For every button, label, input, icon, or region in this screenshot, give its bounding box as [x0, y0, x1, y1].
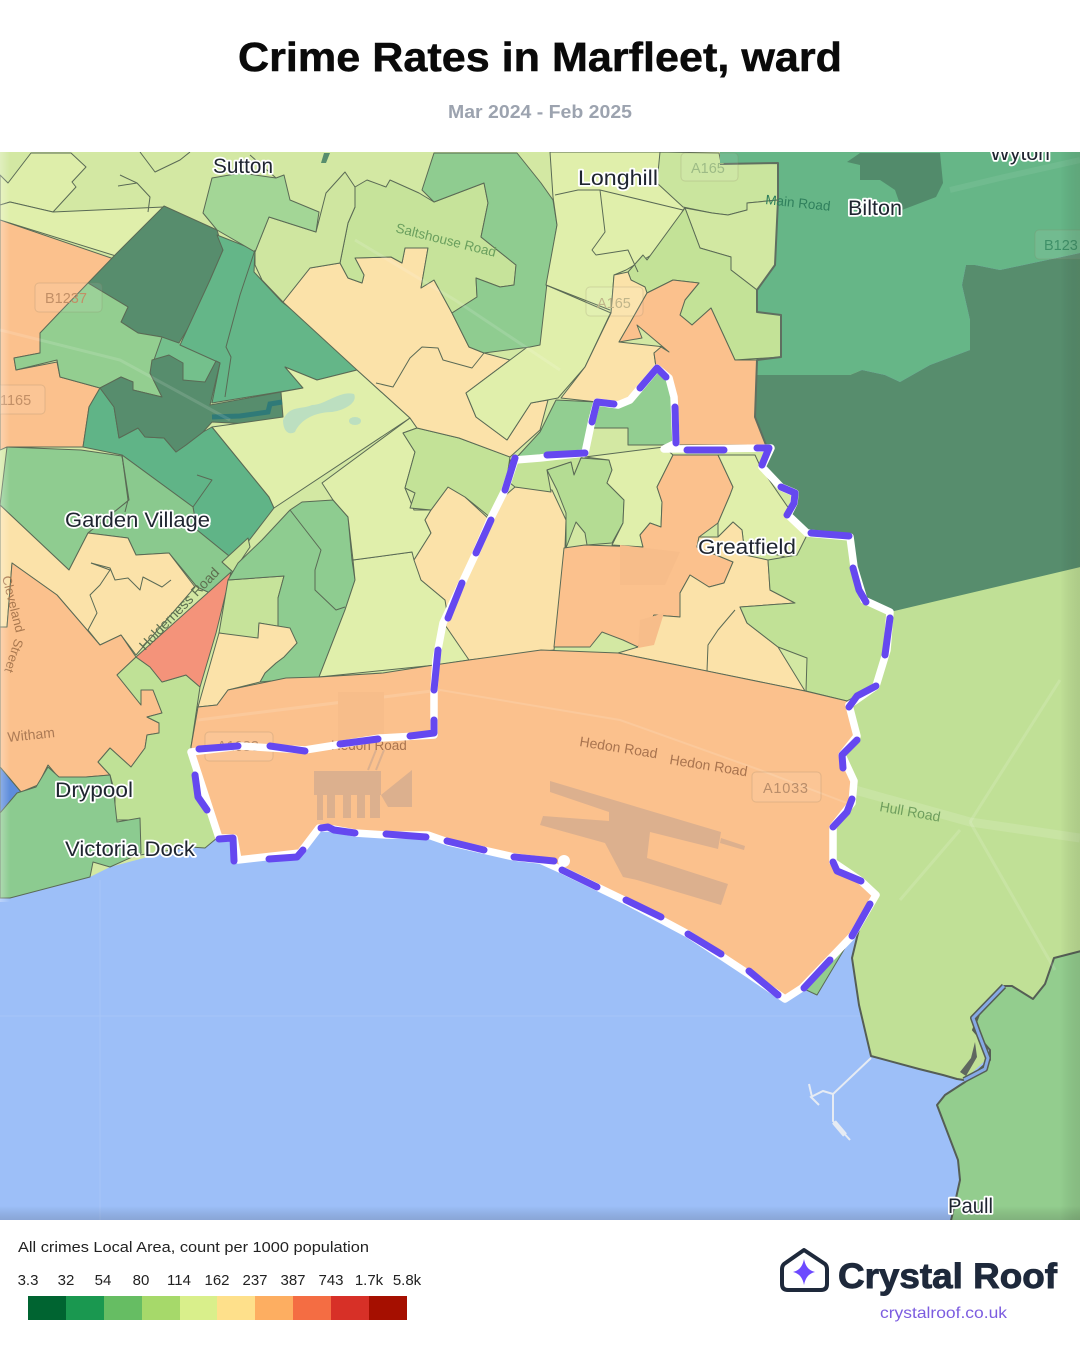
ward: east coast line: [852, 929, 964, 1080]
label: Drypool: Drypool: [55, 779, 133, 802]
ward: tan Marfleet west: [443, 487, 566, 660]
road number: A165: A165: [597, 296, 631, 312]
ward: lime inside: [547, 458, 624, 548]
ward: wedge on coast: [802, 936, 852, 995]
boundary: white outline: [191, 368, 890, 999]
road number: B1237: B1237: [45, 291, 87, 307]
road names: [0, 161, 1078, 825]
legend scale labels: 162: [204, 1272, 230, 1289]
ward: orange Witham: [0, 563, 162, 792]
ward: tan Greatfield: [618, 522, 805, 691]
road name: Holderness Road: Holderness Road: [136, 564, 222, 653]
ward: orange north centre: [619, 280, 766, 445]
map edge shading: [0, 152, 1080, 1220]
ward: mid green Victoria Dock: [0, 767, 141, 898]
ward: dark green north-west: [88, 206, 223, 343]
label: Greatfield: Greatfield: [698, 536, 796, 559]
website url: crystalroof.co.uk: [880, 1305, 1008, 1322]
ward: tan north centre: [561, 272, 665, 406]
faint roads: [0, 160, 1080, 970]
legend scale labels: 3.3: [18, 1272, 38, 1289]
ward: tan large north: [283, 248, 548, 457]
land base: [0, 152, 860, 898]
label: Bilton: Bilton: [848, 197, 902, 220]
road number: A165 top: A165: [691, 161, 725, 177]
park pond: [283, 393, 361, 433]
ward: mid green Garden Village: [0, 447, 129, 570]
legend scale labels: 54: [95, 1272, 111, 1289]
logo wordmark: Crystal Roof: [838, 1257, 1057, 1296]
ward: backing mid green centre-west: [150, 337, 220, 403]
ward: top-left pale: [0, 153, 86, 212]
label: Sutton: Sutton: [213, 155, 273, 178]
legend scale labels: 114: [167, 1272, 191, 1289]
subtitle: Mar 2024 - Feb 2025: [448, 102, 632, 122]
road badges: [0, 153, 1080, 802]
ward: green central-west: [180, 235, 357, 403]
legend title: All crimes Local Area, count per 1000 population: [18, 1239, 369, 1256]
legend scale labels: 32: [58, 1272, 74, 1289]
map: [0, 152, 1080, 1220]
ward: dark green centre: [100, 355, 283, 452]
ward: green south of dark: [83, 388, 274, 560]
road name: Main Road: Main Road: [765, 192, 831, 214]
Sutton small dark patch: [321, 153, 330, 163]
ward: lime north: [255, 172, 355, 302]
ward: orange north-west: [0, 220, 114, 450]
road name: Saltshouse Road: Saltshouse Road: [394, 220, 498, 260]
legend scale labels: 5.8k: [393, 1272, 422, 1289]
ward: mid green Sutton: [203, 173, 319, 252]
ward: lime centre: [403, 428, 510, 518]
label: Paull: Paull: [948, 1195, 993, 1218]
ward: tan centre: [414, 487, 490, 618]
legend scale labels: [18, 1272, 422, 1289]
river channel east: [964, 986, 1004, 1080]
ward: mid green north of Holderness Road: [88, 455, 234, 593]
ward: mid green west: [14, 283, 162, 397]
legend scale labels: 80: [133, 1272, 149, 1289]
ward: interior boundary lines: [88, 152, 735, 671]
ward: lime north-east: [685, 200, 778, 290]
ward: Bilton west edge: [720, 163, 781, 445]
label: Garden Village: Garden Village: [65, 509, 210, 532]
creek mouth mark: [960, 1042, 977, 1076]
jetty: [809, 1058, 871, 1140]
ward: lime Drypool east: [98, 657, 217, 855]
label: Longhill: Longhill: [578, 167, 658, 190]
ward: orange Greatfield west: [554, 455, 733, 647]
ward: red Holderness: [136, 572, 231, 687]
road name: Hedon Road 2: Hedon Road: [669, 751, 749, 779]
ward: lime north-east top: [657, 152, 778, 215]
ward: tan west: [0, 505, 195, 655]
label: Victoria Dock: Victoria Dock: [65, 838, 196, 861]
ward: lime south: [219, 576, 284, 640]
ward: lime Saltshouse: [340, 180, 516, 313]
ward: pale centre: [322, 418, 431, 560]
logo icon: house with star: [782, 1250, 827, 1290]
ward: park pale: [212, 367, 410, 508]
road number: A1033: A1033: [763, 781, 808, 797]
sea: [0, 152, 1080, 1220]
ward: tan south-west: [198, 623, 297, 707]
footer: [18, 1239, 1058, 1322]
ward: sliver lime: [222, 538, 250, 572]
darker industrial patches on orange: [338, 545, 680, 740]
ward: mid green inside boundary: [517, 368, 676, 458]
boundary: white spur: [558, 855, 570, 867]
ward: lime wedge: [510, 454, 585, 492]
ward boundary highlight: [191, 368, 890, 999]
road name: Witham: Witham: [7, 724, 56, 745]
docks buildings: [314, 750, 745, 905]
legend scale labels: 1.7k: [355, 1272, 384, 1289]
road number: B123: B123: [1044, 238, 1078, 254]
water channel: [212, 402, 282, 417]
road number: A1033 west: A1033: [217, 739, 259, 755]
ward: pale Longhill: [546, 152, 685, 313]
ward: pale inside: [585, 447, 673, 547]
ward: south-east mid green: [937, 950, 1080, 1225]
header: [238, 34, 842, 122]
ward: top-left band: [0, 202, 164, 256]
ward: mid green east of Holderness Road: [228, 500, 355, 682]
road name: Hedon Road 1: Hedon Road: [579, 733, 659, 761]
road name: Street: Street: [1, 637, 26, 675]
ward: lime east of Greatfield: [740, 535, 890, 701]
place labels: [55, 142, 1050, 1218]
legend colour bar: [28, 1296, 407, 1320]
title: Crime Rates in Marfleet, ward: [238, 34, 842, 80]
east lime farmland: [833, 563, 1080, 1080]
ward: river Hull at map edge: [0, 767, 21, 813]
ward: pale south centre: [319, 552, 469, 677]
ward: mid green north: [422, 153, 557, 353]
ward: pale north centre: [466, 285, 612, 440]
sea tile seams: [0, 880, 870, 1220]
road number: 1165: 1165: [0, 393, 31, 409]
ward: lime Sutton Park: [628, 208, 781, 360]
legend scale labels: 387: [280, 1272, 306, 1289]
road name: Hull Road: Hull Road: [878, 798, 942, 825]
legend scale labels: 237: [242, 1272, 268, 1289]
road name: Hedon Road west: Hedon Road: [331, 738, 407, 753]
choropleth wards: [0, 150, 1080, 1225]
ward: Wilmington dark patch: [847, 153, 943, 210]
ward: pale Greatfield: [718, 455, 807, 560]
legend scale labels: 743: [318, 1272, 344, 1289]
ward: Marfleet south orange: [191, 650, 876, 999]
ward: big dark green east: [755, 252, 1080, 612]
ward: Bilton green: [720, 150, 1080, 382]
boundary: purple dashes: [195, 368, 890, 995]
